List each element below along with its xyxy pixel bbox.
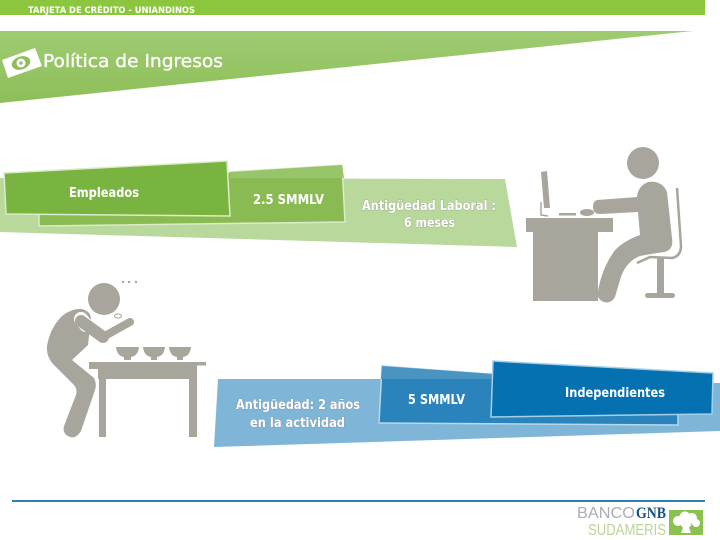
- top bar: TARJETA DE CRÉDITO - UNIANDINOS: [28, 4, 195, 16]
- icon: tree: [669, 510, 703, 535]
- label: independientes: Independientes: [565, 385, 665, 401]
- light green strip: [0, 178, 517, 247]
- label: empleados: Empleados: [69, 185, 139, 201]
- label: antigüedad laboral: 6 meses: [404, 215, 455, 231]
- icon: person at desk: [526, 147, 681, 302]
- logo: BANCO: [577, 505, 635, 522]
- light blue strip: [214, 379, 720, 447]
- logo: SUDAMERIS: [588, 522, 666, 539]
- label: 5 SMMLV: 5 SMMLV: [408, 392, 465, 408]
- logo: [577, 505, 703, 539]
- empleados box: [4, 161, 230, 216]
- icon: banknote: [2, 48, 42, 78]
- panel: independientes: [214, 361, 720, 447]
- header banner: [0, 31, 693, 103]
- label: antigüedad: [236, 397, 360, 431]
- title: Política de Ingresos: [43, 51, 223, 72]
- income box: [39, 165, 345, 226]
- icon: person eating: [47, 281, 206, 437]
- top bar: [0, 0, 705, 16]
- independientes box: [491, 361, 713, 417]
- panel: empleados: [0, 161, 517, 247]
- logo: GNB: [636, 505, 666, 522]
- footer rule: [12, 500, 705, 502]
- label: antigüedad laboral: Antigüedad Laboral :: [362, 198, 496, 214]
- label: antigüedad laboral: [362, 198, 496, 231]
- label: antigüedad: en la actividad: [250, 415, 345, 431]
- label: 2.5 SMMLV: 2.5 SMMLV: [253, 192, 324, 208]
- income box: [379, 366, 678, 425]
- label: antigüedad: Antigüedad: 2 años: [236, 397, 360, 413]
